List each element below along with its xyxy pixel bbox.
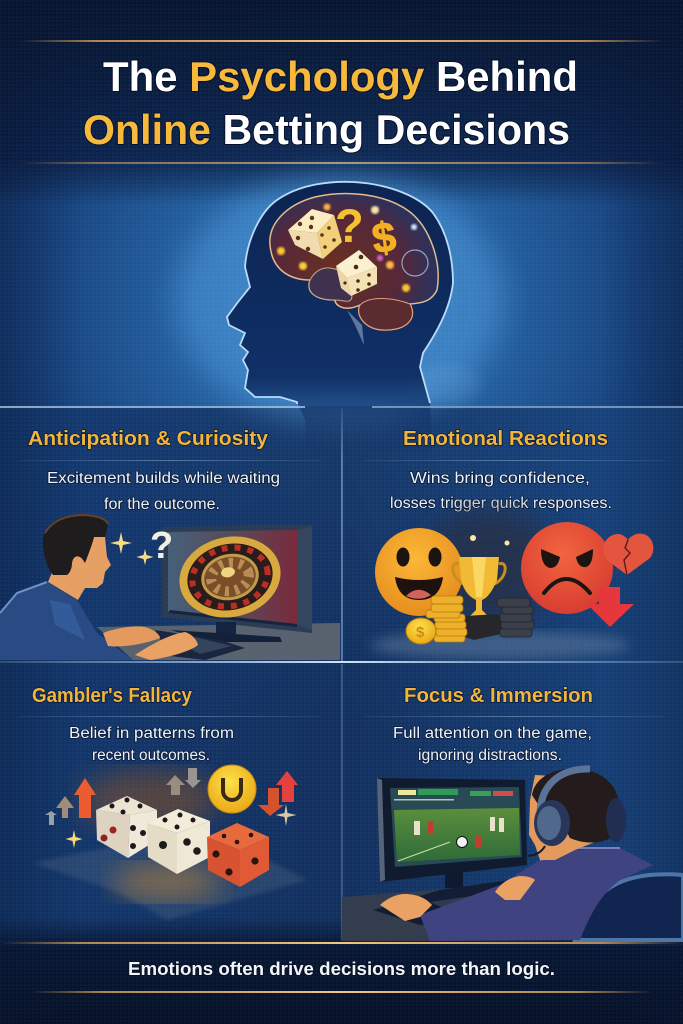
- illustration: emotions: [370, 510, 653, 659]
- die white middle: [147, 809, 210, 874]
- icon: coin: [406, 618, 436, 644]
- brain: [270, 194, 438, 330]
- text block: Belief in patterns from: [69, 725, 234, 742]
- illustration: person watching match: [342, 769, 683, 941]
- icon: down arrow: [587, 587, 634, 627]
- monitor: [377, 778, 527, 882]
- head silhouette: [227, 182, 453, 460]
- arrows rising: [45, 768, 298, 825]
- text block: Excitement builds while waiting: [47, 470, 280, 487]
- icon: black chips: [497, 598, 534, 637]
- person: [420, 848, 653, 941]
- text block: losses trigger quick responses.: [390, 495, 612, 512]
- icon: broken heart: [603, 534, 653, 575]
- text block: [393, 725, 592, 764]
- title: [83, 53, 578, 153]
- text block: [47, 470, 280, 513]
- die orange: [207, 823, 269, 887]
- icon: happy face: [375, 528, 463, 616]
- heading: Focus & Immersion: [404, 685, 593, 707]
- roulette wheel: [172, 527, 288, 627]
- hands: [380, 894, 432, 921]
- icon: question mark: ?: [335, 199, 364, 252]
- title: Online Betting Decisions: [83, 106, 570, 153]
- panel: emotional reactions: [370, 428, 653, 659]
- text block: Full attention on the game,: [393, 725, 592, 742]
- text block: ignoring distractions.: [418, 747, 562, 764]
- title: The Psychology Behind: [103, 53, 578, 100]
- icon: small die in brain: [336, 250, 377, 296]
- hands: [103, 626, 160, 646]
- footer text: Emotions often drive decisions more than logic.: [128, 959, 555, 979]
- icon: dollar sign: $: [369, 212, 399, 262]
- headphones: [528, 769, 626, 856]
- die white left: [96, 796, 157, 858]
- heading: Anticipation & Curiosity: [28, 428, 269, 450]
- icon: question mark: ?: [150, 525, 173, 567]
- panel: anticipation and curiosity: [0, 428, 340, 660]
- keyboard: [373, 880, 530, 925]
- text block: [390, 470, 612, 512]
- desk: [342, 885, 530, 941]
- chair: [575, 874, 683, 940]
- heading: Gambler's Fallacy: [32, 685, 193, 707]
- man: [0, 582, 133, 660]
- icon: sparkles: [66, 804, 296, 848]
- illustration: head silhouette with brain: [175, 175, 505, 460]
- heading: Emotional Reactions: [403, 428, 608, 450]
- icon: gold coin stack: [426, 596, 467, 642]
- text block: for the outcome.: [104, 496, 220, 513]
- icon: horseshoe coin: [208, 765, 256, 813]
- panel: gamblers fallacy: [32, 685, 307, 920]
- icon: large die in brain: [288, 209, 342, 259]
- icon: trophy: [453, 557, 505, 640]
- text block: [69, 725, 234, 764]
- illustration: dice and arrows: [33, 765, 307, 920]
- text block: recent outcomes.: [92, 747, 210, 764]
- monitor: [162, 525, 312, 633]
- icon: angry face: [521, 522, 613, 614]
- illustration: man at computer with roulette: [0, 515, 340, 660]
- panel: focus and immersion: [342, 685, 683, 941]
- icon: sparkles: [110, 532, 154, 565]
- icon: coin: $: [416, 624, 425, 641]
- text block: Wins bring confidence,: [410, 470, 590, 487]
- keyboard: [155, 630, 245, 660]
